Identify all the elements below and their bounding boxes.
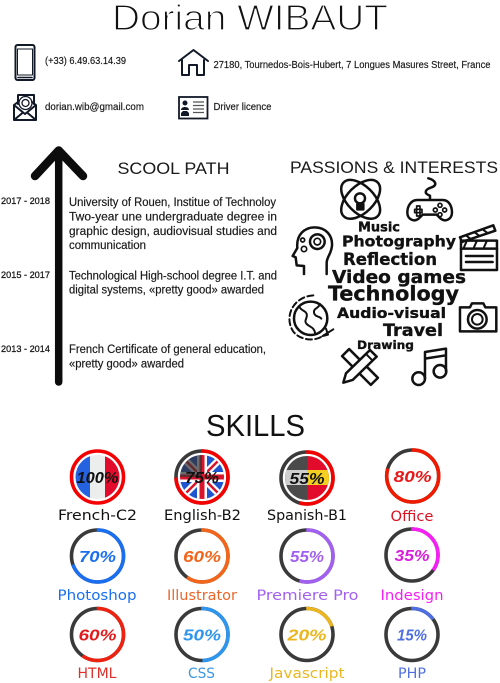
icon: phone <box>16 45 34 80</box>
skill: HTML <box>72 608 124 682</box>
skill: Illustrator: Illustrator <box>167 588 237 604</box>
timeline entry 2017: Two-year une undergraduate degree in <box>69 212 277 224</box>
skill: Office: Office <box>390 509 434 525</box>
arrow: timeline <box>35 150 83 382</box>
timeline entry 2013: «pretty good» awarded <box>69 358 184 370</box>
word cloud: Travel <box>383 321 443 341</box>
email: dorian.wib@gmail.com <box>45 102 144 113</box>
heading: passions and interests: PASSIONS & INTERESTS <box>290 158 498 177</box>
skill: HTML: HTML <box>78 666 116 682</box>
skill: French: 100% <box>76 470 118 487</box>
icon: head with gears <box>293 227 332 274</box>
timeline entry 2015 <box>1 270 277 296</box>
icon: clapperboard <box>460 225 497 270</box>
icon: globe with plane <box>289 295 333 339</box>
word cloud: Technology <box>328 282 459 306</box>
icon: music notes <box>412 349 446 385</box>
icon: email envelope <box>14 95 36 120</box>
timeline entry 2017: 2017 - 2018 <box>1 196 50 207</box>
word cloud: Audio-visual <box>337 306 446 322</box>
skill: Photoshop <box>58 530 136 604</box>
skill: Spanish: 55% <box>290 471 324 488</box>
word cloud: Video games <box>332 267 466 288</box>
timeline entry 2015: Technological High-school degree I.T. and <box>69 270 277 282</box>
skill: Premiere Pro: 55% <box>290 549 324 566</box>
skill: Photoshop: Photoshop <box>58 588 136 604</box>
skill: PHP <box>386 608 438 682</box>
icon: camera <box>460 303 496 331</box>
skill: Indesign: Indesign <box>380 588 444 604</box>
timeline entry 2017: University of Rouen, Institue of Technoloy <box>69 197 276 209</box>
heading: skills: SKILLS <box>206 408 305 443</box>
skill: French <box>58 451 137 524</box>
skill: Spanish <box>267 452 347 524</box>
skill: Premiere Pro <box>256 530 359 604</box>
word cloud: Reflection <box>343 250 437 270</box>
skill: PHP: 15% <box>397 628 427 644</box>
icon: house <box>179 50 208 75</box>
heading: school path: SCOOL PATH <box>118 159 230 178</box>
skill: CSS: CSS <box>188 666 215 682</box>
contact block <box>14 45 491 120</box>
icon: game controller <box>407 178 452 220</box>
icon: light bulb atom <box>334 173 387 226</box>
timeline entry 2013: French Certificate of general education, <box>69 344 266 356</box>
skill: Illustrator <box>167 530 237 604</box>
word cloud <box>328 220 466 352</box>
skill: Office <box>387 450 439 525</box>
icon: pencil and ruler <box>342 349 378 385</box>
skill: Premiere Pro: Premiere Pro <box>256 588 359 604</box>
word cloud: Drawing <box>357 338 414 352</box>
skill: Office: 80% <box>394 469 432 486</box>
skill: Photoshop: 70% <box>79 549 116 566</box>
skill: CSS: 50% <box>183 628 221 644</box>
timeline entry 2013 <box>1 344 266 370</box>
skill: Indesign <box>380 529 444 604</box>
skill: Indesign: 35% <box>394 548 430 565</box>
timeline entry 2017: communication <box>69 240 146 252</box>
skill: PHP: PHP <box>398 666 426 682</box>
skill: French: French-C2 <box>58 508 137 524</box>
timeline entry 2017: graphic design, audiovisual studies and <box>69 226 277 238</box>
timeline entry 2015: digital systems, «pretty good» awarded <box>69 284 264 296</box>
word cloud: Music <box>358 220 400 236</box>
skill: English: 75% <box>185 470 219 487</box>
icon: driver licence <box>179 97 208 118</box>
skill: HTML: 60% <box>78 628 116 644</box>
skill: English <box>164 451 241 524</box>
driver licence text: Driver licence <box>214 102 272 113</box>
phone number: (+33) 6.49.63.14.39 <box>45 56 126 67</box>
timeline entry 2015: 2015 - 2017 <box>1 270 50 281</box>
timeline entry 2017 <box>1 196 277 252</box>
word cloud: Photography <box>342 232 456 250</box>
skill: Illustrator: 60% <box>183 549 221 566</box>
skill: Javascript: 20% <box>286 628 326 644</box>
skill: CSS <box>176 608 228 682</box>
skill: Javascript <box>268 608 345 682</box>
timeline entry 2013: 2013 - 2014 <box>1 344 50 355</box>
skill: Javascript: Javascript <box>268 666 345 682</box>
skill: Spanish: Spanish-B1 <box>267 508 347 524</box>
skill: English: English-B2 <box>164 508 241 524</box>
